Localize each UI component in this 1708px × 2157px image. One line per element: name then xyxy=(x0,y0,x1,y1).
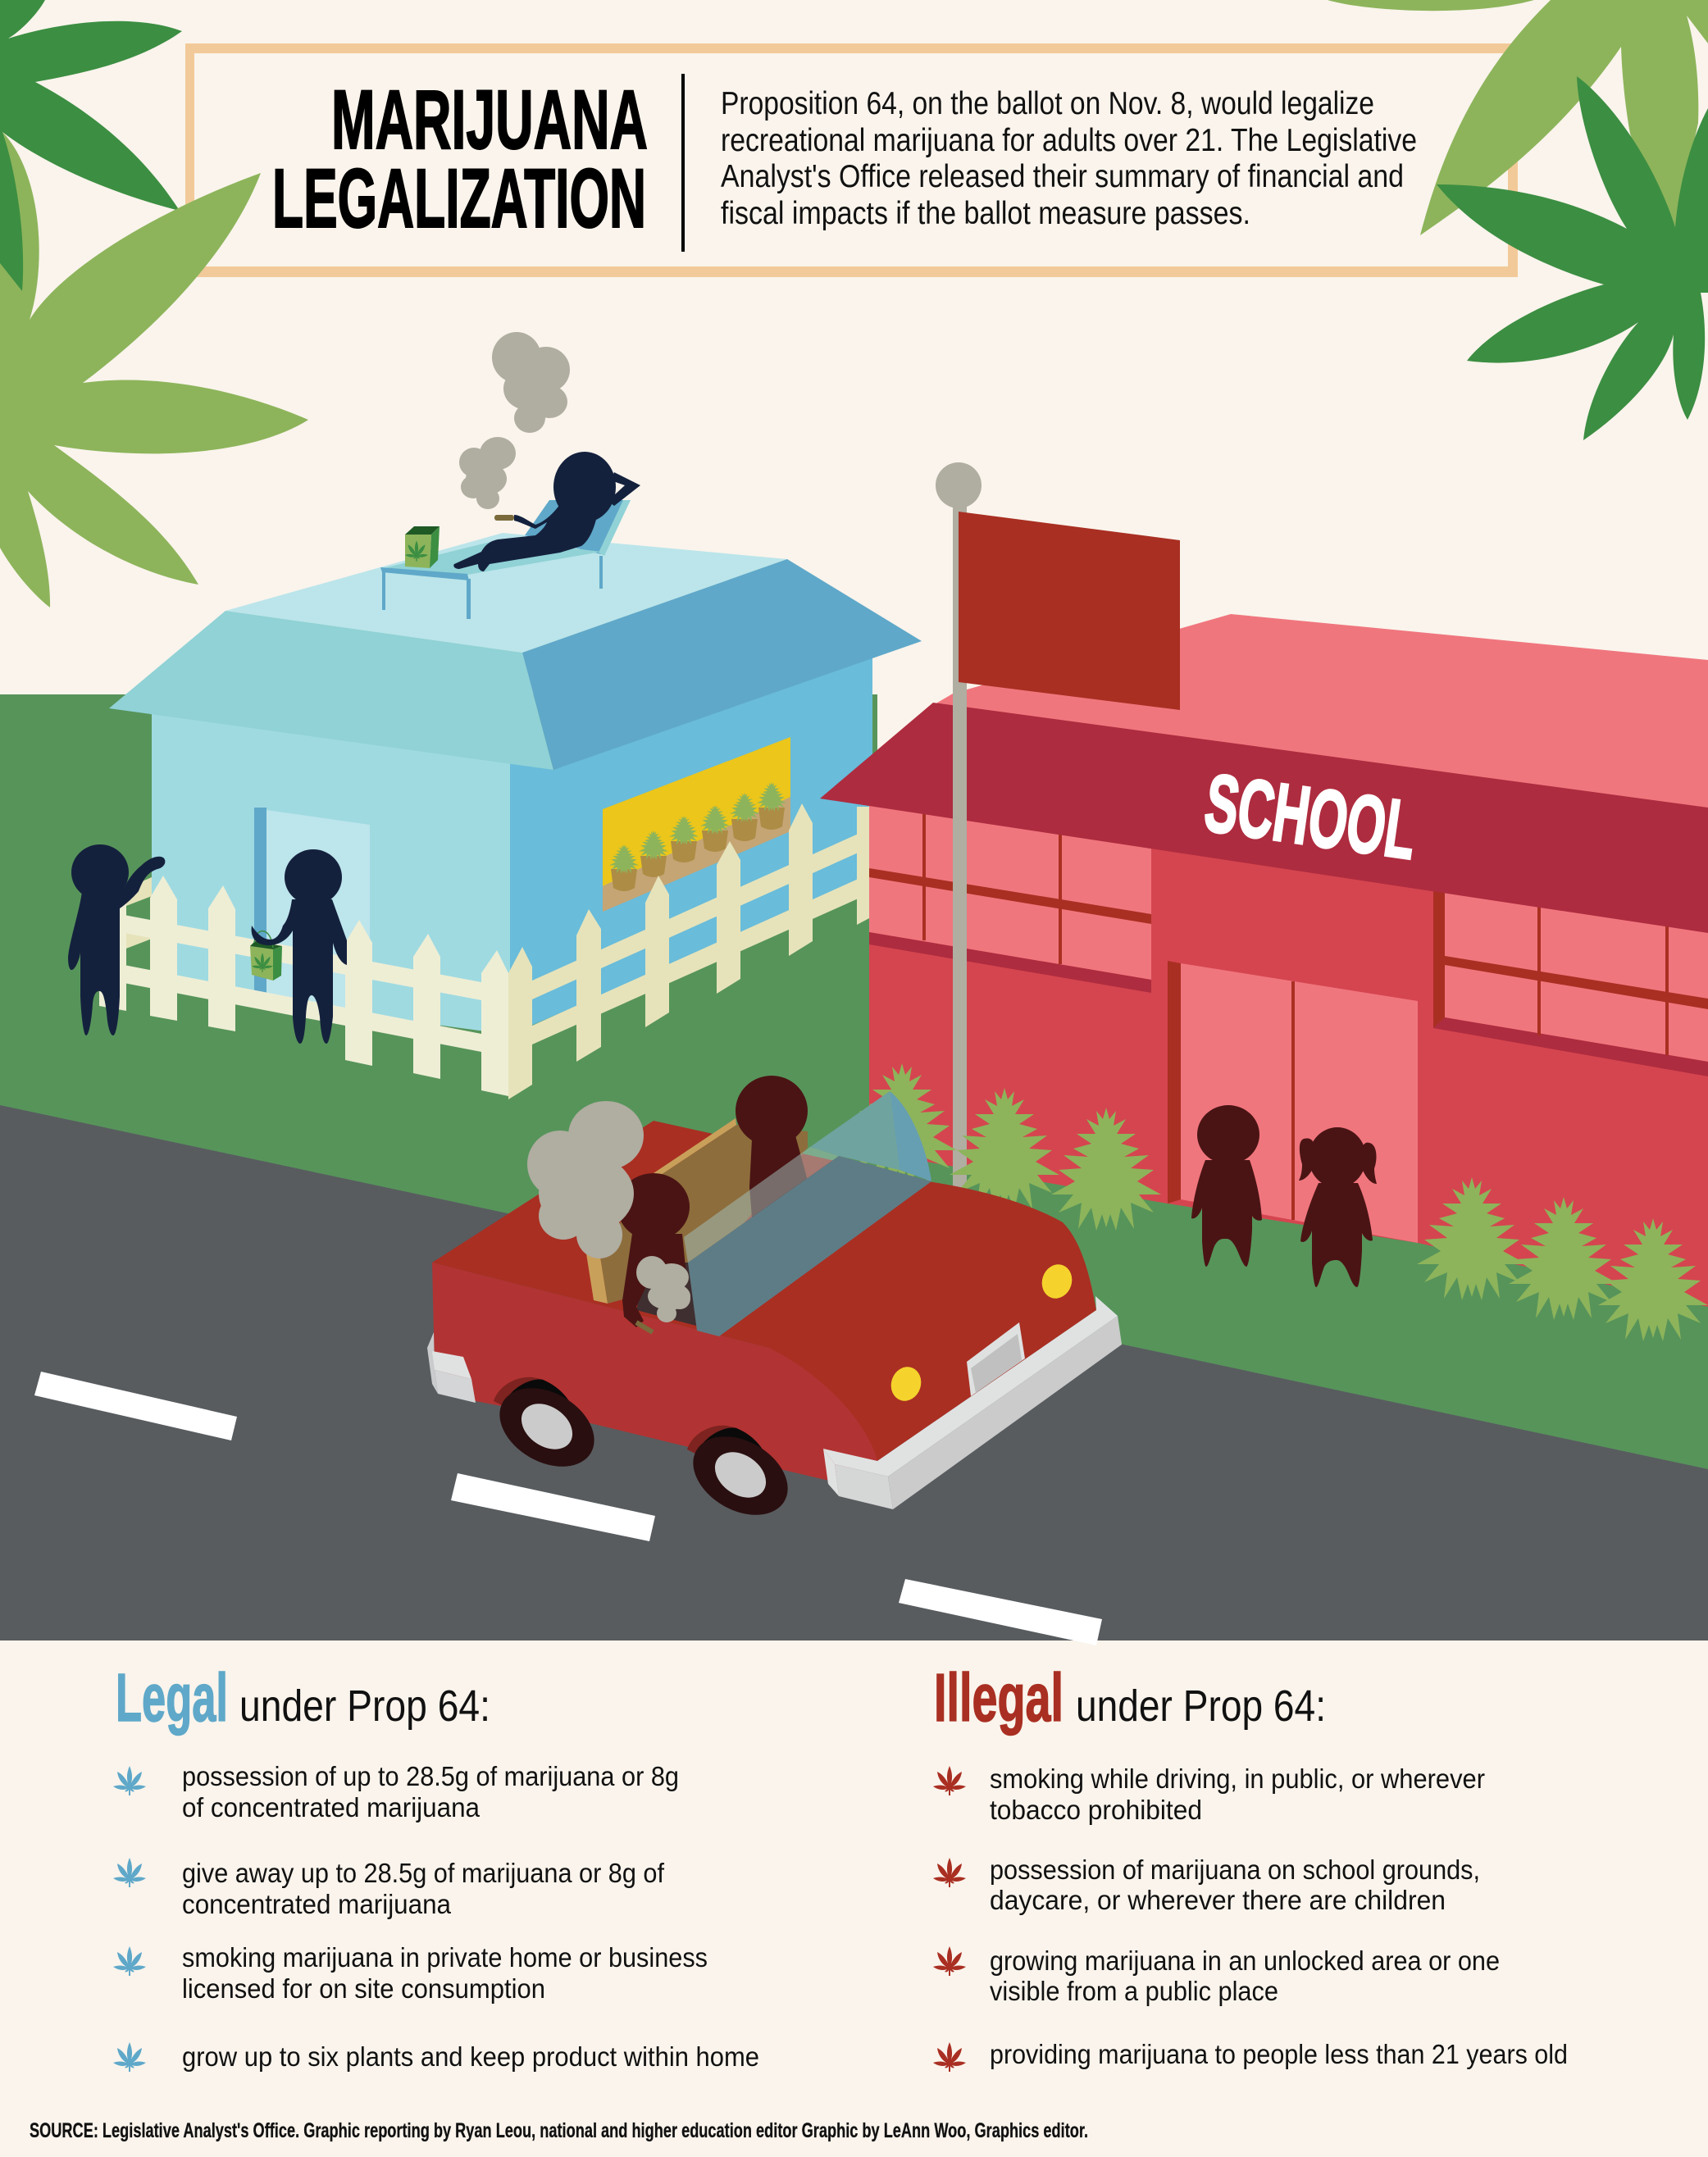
car top surface xyxy=(432,1121,1096,1461)
illegal heading: Illegal xyxy=(934,1659,1064,1736)
intro text: fiscal impacts if the ballot measure passes. xyxy=(721,196,1250,231)
person holding bag xyxy=(250,849,347,1044)
legal list: of concentrated marijuana xyxy=(182,1792,481,1823)
person waving xyxy=(68,844,165,1035)
legal list: smoking marijuana in private home or business xyxy=(182,1942,708,1973)
school wall xyxy=(869,820,1708,1307)
door xyxy=(254,808,370,1017)
roof top face xyxy=(225,533,787,653)
illegal list: growing marijuana in an unlocked area or one xyxy=(990,1945,1500,1976)
figure xyxy=(252,849,347,1044)
legal icons xyxy=(113,1766,146,2072)
header frame xyxy=(185,43,1518,277)
marijuana box xyxy=(405,526,440,568)
intro text: Analyst's Office released their summary of financial and xyxy=(721,159,1404,194)
illegal list: visible from a public place xyxy=(990,1976,1278,2006)
dark leaves xyxy=(1437,76,1708,440)
light leaves xyxy=(1420,0,1708,235)
school roof band xyxy=(820,703,1708,933)
big smoke cloud xyxy=(527,1101,644,1258)
roof right face xyxy=(522,559,922,770)
legal heading: under Prop 64: xyxy=(239,1681,490,1731)
legal heading: Legal xyxy=(116,1659,228,1736)
lounge chair xyxy=(380,500,631,619)
illegal list: daycare, or wherever there are children xyxy=(990,1885,1446,1915)
grass ground xyxy=(0,694,1708,1472)
red convertible car xyxy=(427,1076,1122,1531)
entrance door xyxy=(1168,961,1418,1243)
top right cannabis leaves xyxy=(1328,0,1708,440)
rear passenger xyxy=(736,1076,808,1217)
illegal heading: under Prop 64: xyxy=(1076,1681,1326,1731)
boy silhouette xyxy=(1191,1105,1262,1267)
road xyxy=(0,1105,1708,1641)
dark leaf xyxy=(0,0,182,291)
house right wall xyxy=(510,648,872,1035)
road dashes xyxy=(34,1372,1102,1645)
legal list: possession of up to 28.5g of marijuana or 8g xyxy=(182,1761,679,1791)
picket fence xyxy=(99,803,869,1099)
intro text: recreational marijuana for adults over 21. The Legislative xyxy=(721,123,1417,158)
top left cannabis leaves xyxy=(0,0,308,608)
illegal list xyxy=(990,1763,1568,2069)
light top arc xyxy=(1328,0,1534,11)
roof left face xyxy=(109,611,553,770)
illegal list: tobacco prohibited xyxy=(990,1795,1202,1825)
car side panel xyxy=(432,1263,877,1481)
house xyxy=(109,533,922,1035)
windshield xyxy=(684,1091,931,1336)
illegal panel xyxy=(933,1659,1568,2072)
light stem leaf xyxy=(0,132,39,344)
headlights xyxy=(886,1260,1077,1405)
title xyxy=(272,73,648,245)
illegal list: possession of marijuana on school grounds, xyxy=(990,1854,1480,1885)
front fence xyxy=(99,876,508,1096)
girl silhouette xyxy=(1299,1127,1377,1287)
house left wall xyxy=(152,705,510,1035)
legal list xyxy=(182,1761,759,2072)
right windows xyxy=(1433,885,1708,1076)
marijuana bushes xyxy=(847,1063,1708,1341)
illegal list: smoking while driving, in public, or wherever xyxy=(990,1763,1485,1794)
school sign: SCHOOL xyxy=(1200,757,1422,877)
title: LEGALIZATION xyxy=(272,152,646,245)
source line: SOURCE: Legislative Analyst's Office. Graphic reporting by Ryan Leou, national and higher education editor Graphic by LeAnn Woo, Graphics editor. xyxy=(30,2119,1088,2142)
legal heading xyxy=(116,1659,490,1736)
far left fence rails xyxy=(120,877,152,951)
front bumper xyxy=(823,1296,1122,1509)
rear wheel xyxy=(485,1372,608,1482)
shop window with potted plants xyxy=(603,737,790,912)
intro text: Proposition 64, on the ballot on Nov. 8, would legalize xyxy=(721,86,1374,121)
school building xyxy=(820,614,1708,1307)
person relaxing on roof xyxy=(380,452,640,619)
side fence xyxy=(508,803,869,1099)
school roof xyxy=(933,614,1708,812)
light leaf xyxy=(0,173,308,608)
left windows xyxy=(869,787,1151,993)
legal list: licensed for on site consumption xyxy=(182,1973,545,2004)
legal panel xyxy=(113,1659,759,2072)
illegal icons xyxy=(933,1766,966,2072)
illegal heading xyxy=(934,1659,1326,1736)
grille xyxy=(967,1322,1025,1396)
title: MARIJUANA xyxy=(331,73,648,166)
joint xyxy=(494,515,514,521)
rear seat back xyxy=(586,1118,808,1326)
legal list: grow up to six plants and keep product within home xyxy=(182,2041,759,2072)
flagpole and flag xyxy=(936,462,1180,1189)
small smoke cloud xyxy=(636,1256,690,1322)
relaxing figure xyxy=(453,452,640,571)
title divider xyxy=(681,74,685,252)
front wheel xyxy=(679,1421,802,1531)
intro text xyxy=(721,86,1417,231)
legal list: concentrated marijuana xyxy=(182,1889,452,1919)
bag xyxy=(250,931,282,981)
illegal list: providing marijuana to people less than 21 years old xyxy=(990,2039,1568,2069)
smoke clouds from roof xyxy=(459,332,570,509)
legal list: give away up to 28.5g of marijuana or 8g of xyxy=(182,1858,665,1888)
rear bumper xyxy=(427,1332,476,1403)
driver xyxy=(617,1173,690,1332)
